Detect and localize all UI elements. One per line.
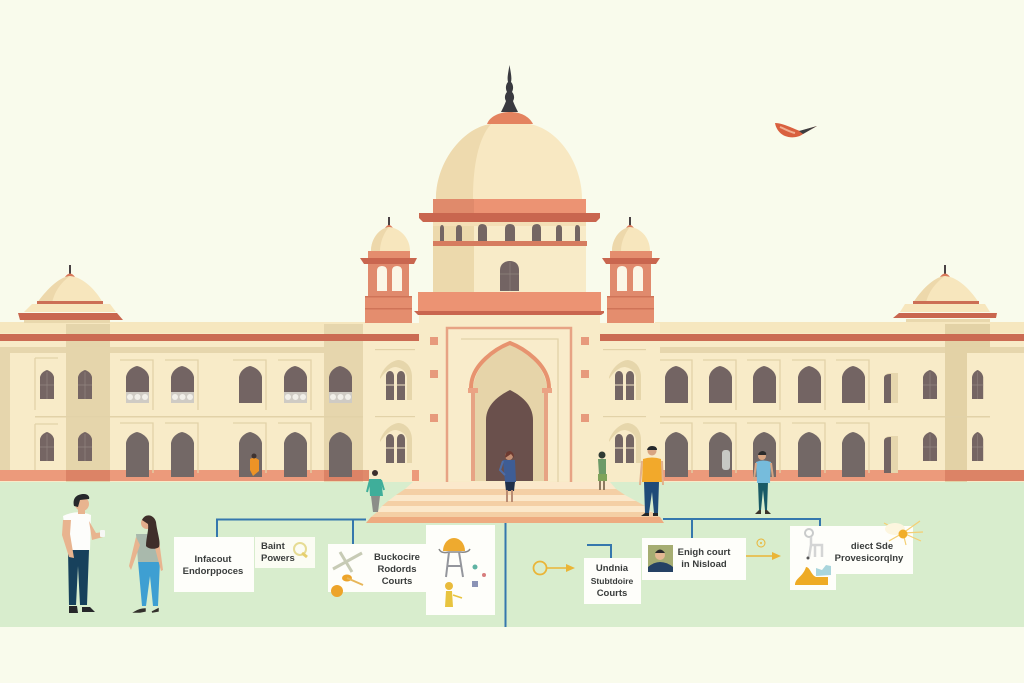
card: Undnia Stubtdoire Courts: Courts — [597, 588, 627, 599]
courthouse building — [0, 65, 1024, 482]
lawn — [0, 482, 1024, 627]
central tower blocks and parapet — [363, 292, 660, 482]
person: small orange figure — [250, 454, 259, 476]
person: teal shirt on left of steps — [367, 470, 384, 512]
card: Enigh court in Nisload — [642, 538, 746, 580]
central dome — [419, 65, 600, 292]
card: Enigh court in Nisload: in Nisload — [681, 559, 727, 570]
central portal — [430, 327, 589, 482]
icon: flying bird — [775, 123, 817, 137]
card: Buckocire Rodords Courts — [328, 544, 426, 597]
left wing — [0, 322, 418, 482]
person: man in blue shirt — [754, 451, 773, 514]
person: green outfit on steps — [598, 452, 607, 490]
side tower: right — [602, 217, 660, 323]
card: scientist illustration — [426, 525, 495, 615]
person: man with phone — [62, 494, 105, 613]
card: Idiect Sde Provesicorqlny — [790, 526, 913, 590]
icon: sun burst — [884, 521, 923, 545]
side dome: left — [18, 265, 123, 323]
card: Infacout Endorppoces: Infacout — [195, 554, 232, 565]
person: woman on steps — [500, 451, 516, 502]
person: man in yellow shirt — [640, 446, 663, 516]
card: Undnia Stubtdoire Courts: Undnia — [596, 563, 629, 574]
person: woman with long hair — [129, 515, 163, 612]
card: Infacout Endorppoces: Endorppoces — [183, 566, 243, 577]
side dome: right — [893, 265, 997, 322]
icon: ring and arrow — [534, 562, 575, 574]
card: Undnia Stubtdoire Courts: Stubtdoire — [591, 576, 634, 586]
card: Enigh court in Nisload: Enigh court — [678, 547, 731, 558]
card: Buckocire Rodords Courts: Buckocire — [374, 552, 420, 563]
card: Infacout Endorppoces — [174, 537, 254, 592]
card: Undnia Stubtdoire Courts — [584, 558, 641, 604]
card: Baint Powers — [255, 537, 315, 568]
card: Idiect Sde Provesicorqlny: diect Sde — [851, 541, 893, 552]
org chart connectors — [217, 519, 820, 627]
right wing — [600, 322, 1024, 482]
side tower: left — [360, 217, 417, 323]
card: Baint Powers: Powers — [261, 553, 295, 564]
icon: small target and arrow — [746, 539, 781, 560]
card: Idiect Sde Provesicorqlny: Provesicorqlny — [835, 553, 904, 564]
entrance steps — [366, 482, 664, 523]
card: Buckocire Rodords Courts: Rodords — [377, 564, 417, 575]
card: Baint Powers: Baint — [261, 541, 286, 552]
card: Buckocire Rodords Courts: Courts — [382, 576, 412, 587]
